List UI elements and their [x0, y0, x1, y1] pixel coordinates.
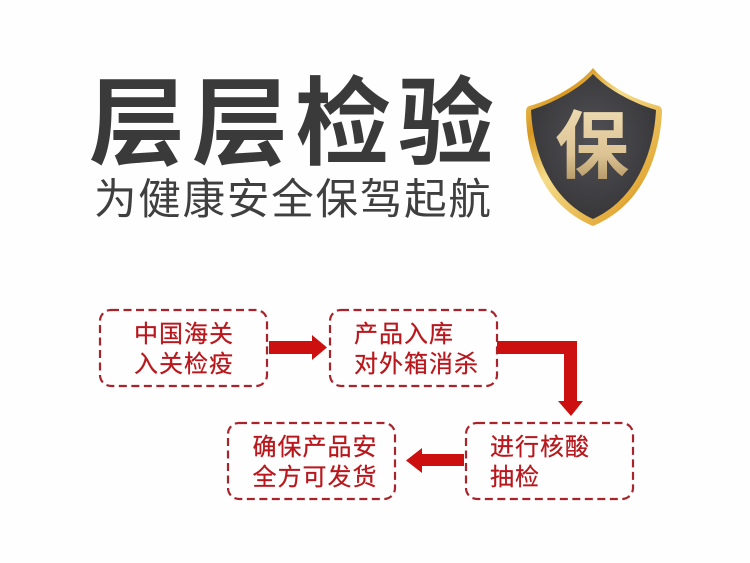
flow box: 中国海关入关检疫: [100, 310, 267, 386]
flow box: 中国海关入关检疫: 中国海关: [134, 321, 234, 348]
arrow: right: [269, 335, 327, 360]
flow box: 进行核酸抽检: 抽检: [490, 464, 540, 491]
flow box: 中国海关入关检疫: 入关检疫: [134, 351, 234, 378]
flow box: 确保产品安全方可发货: 确保产品安: [252, 434, 378, 461]
flow box: 确保产品安全方可发货: 全方可发货: [252, 464, 378, 491]
icon: gold shield with 保: [526, 68, 662, 226]
flow box: 进行核酸抽检: 进行核酸: [490, 434, 590, 461]
flow box: 产品入库对外箱消杀: [330, 310, 497, 386]
title: 层层检验: [89, 71, 501, 178]
arrow: left: [406, 448, 464, 473]
flow box: 产品入库对外箱消杀: 产品入库: [354, 321, 454, 348]
flow box: 确保产品安全方可发货: [228, 423, 395, 499]
icon: gold shield with 保: 保: [555, 105, 629, 188]
arrow: right then down: [497, 341, 583, 416]
flow box: 产品入库对外箱消杀: 对外箱消杀: [354, 351, 479, 378]
subtitle: 为健康安全保驾起航: [94, 177, 493, 224]
flow box: 进行核酸抽检: [466, 423, 633, 499]
